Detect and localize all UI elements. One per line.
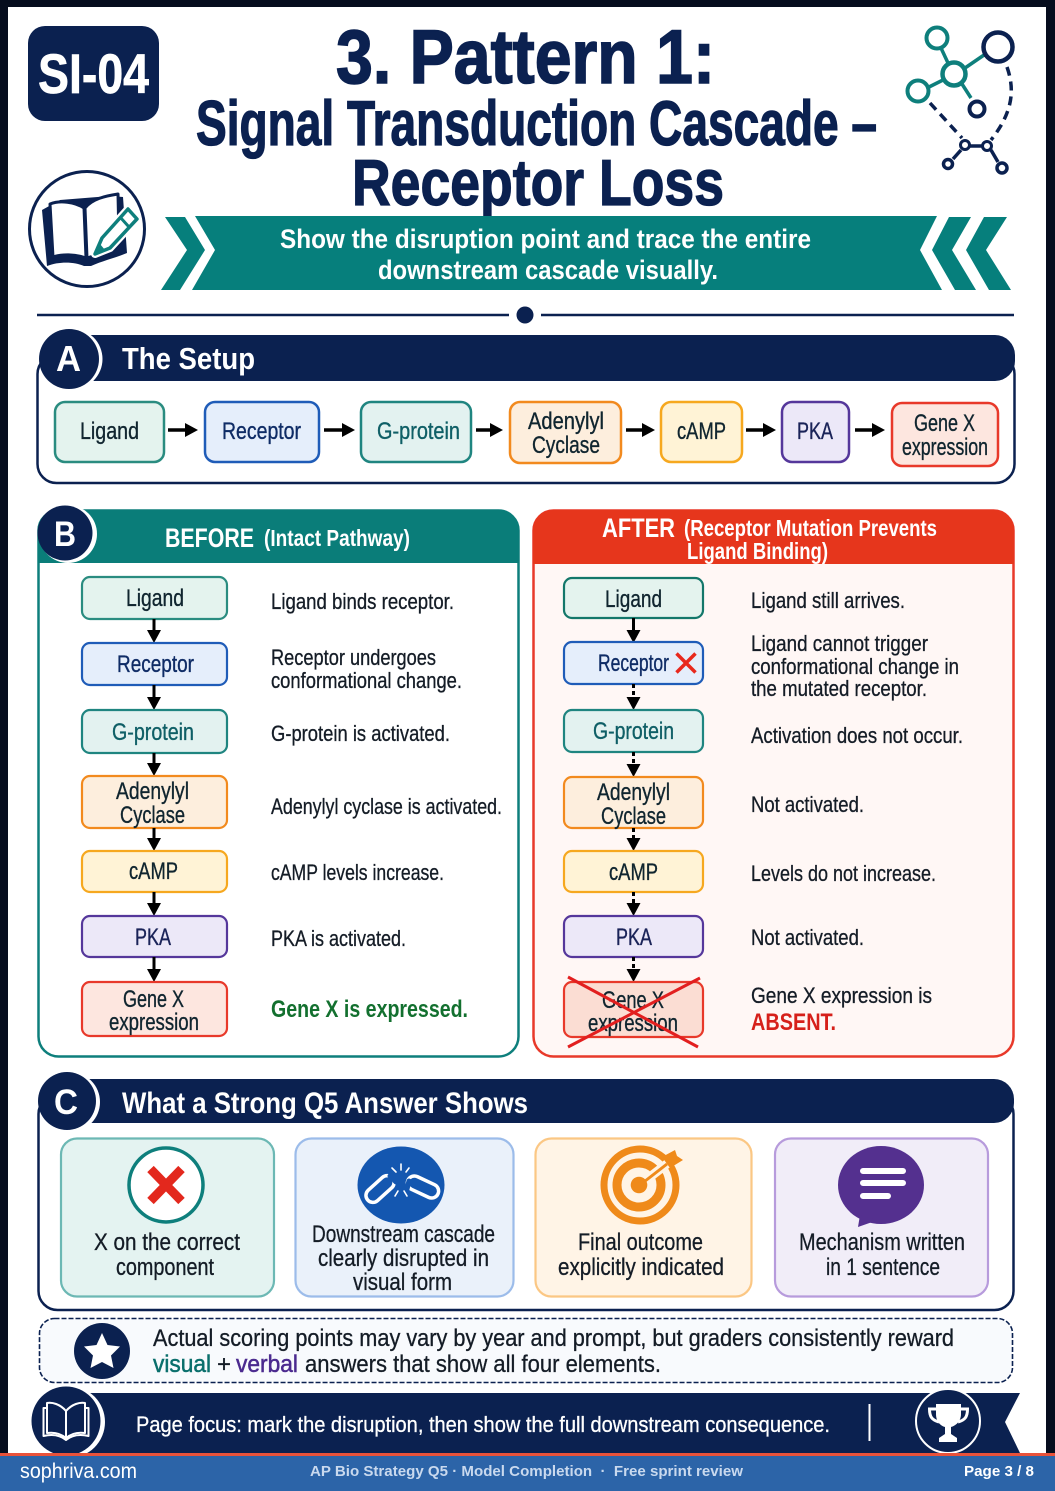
text: conformational change: conformational change. <box>271 668 462 693</box>
text: activation does not occur: Activation does not occur. <box>751 723 963 748</box>
step: Gene X expression crossed out: expression <box>588 1010 678 1037</box>
card: downstream disrupted <box>296 1138 514 1296</box>
arrow <box>147 828 161 851</box>
footer bar <box>0 1453 1055 1491</box>
panel C: what a strong answer shows: What a Strong Q5 Answer Shows <box>122 1087 528 1120</box>
step: Receptor: Receptor <box>222 418 301 445</box>
icon: book and pencil <box>30 172 144 286</box>
footer banner: page focus: Page focus: mark the disruption, then show the full downstream consequence. <box>136 1412 830 1437</box>
step: Gene X expression: Gene X <box>914 410 975 437</box>
step: Ligand <box>82 577 227 619</box>
step: Adenylyl Cyclase <box>564 777 703 830</box>
text: levels do not increase: Levels do not increase. <box>751 861 936 886</box>
arrow <box>746 423 776 437</box>
text: gene x expressed: Gene X is expressed. <box>271 996 468 1023</box>
arrow <box>855 423 885 437</box>
text: g-protein activated: G-protein is activated. <box>271 721 450 746</box>
step: cAMP <box>661 402 742 462</box>
step: cAMP: cAMP <box>609 859 658 886</box>
text: gene x absent: Gene X expression is <box>751 983 932 1008</box>
arrow: dashed <box>626 684 640 710</box>
step: cAMP <box>564 851 703 892</box>
text: gene x absent: ABSENT. <box>751 1009 836 1036</box>
text: cannot trigger: Ligand cannot trigger <box>751 631 928 656</box>
callout: scoring note: visual <box>153 1351 211 1378</box>
panel A: the setup: The Setup <box>122 341 255 376</box>
badge: SI-04: SI-04 <box>38 42 149 105</box>
step: G-protein: G-protein <box>112 719 194 746</box>
step: Adenylyl Cyclase: Cyclase <box>601 803 666 830</box>
title: 3. Pattern 1: <box>336 15 715 100</box>
card: mechanism: Mechanism written <box>799 1229 965 1256</box>
arrow: dashed <box>626 828 640 851</box>
step: Receptor with X <box>564 642 703 684</box>
step: Receptor <box>205 402 319 462</box>
title: Receptor Loss <box>352 146 724 219</box>
step: G-protein: G-protein <box>593 718 674 745</box>
text: cannot trigger: conformational change in <box>751 654 959 679</box>
panel C: what a strong answer shows: C <box>54 1083 78 1122</box>
step: PKA <box>782 402 849 462</box>
panel B: before: (Intact Pathway) <box>264 525 410 551</box>
step: Receptor <box>82 643 227 685</box>
banner: teal ribbon <box>161 216 1011 290</box>
step: cAMP: cAMP <box>677 418 726 445</box>
step: Gene X expression: expression <box>902 434 988 461</box>
card: X on component <box>61 1138 274 1296</box>
step: Ligand: Ligand <box>605 586 662 613</box>
step: Adenylyl Cyclase: Adenylyl <box>116 778 189 805</box>
text: cannot trigger <box>751 631 959 701</box>
step: Gene X expression crossed out: Gene X <box>602 987 664 1014</box>
panel B: before: BEFORE <box>165 523 254 553</box>
icon: speech bubble <box>838 1146 924 1227</box>
step: cAMP: cAMP <box>129 858 178 885</box>
step: Adenylyl Cyclase: Adenylyl <box>528 408 604 435</box>
arrow <box>324 423 355 437</box>
arrow <box>476 423 503 437</box>
arrow: dashed <box>626 892 640 916</box>
panel C: what a strong answer shows <box>38 1072 1014 1310</box>
icon: molecule network <box>908 28 1012 173</box>
step: Gene X expression: expression <box>109 1009 199 1036</box>
step: Ligand <box>55 402 164 462</box>
icon: star <box>74 1323 130 1379</box>
callout: scoring note: answers that show all four elements. <box>305 1351 661 1378</box>
callout: scoring note: Actual scoring points may vary by year and prompt, but graders consistently reward <box>153 1325 954 1352</box>
arrow <box>147 957 161 982</box>
icon: open book <box>44 1403 88 1440</box>
text: ligand arrives: Ligand still arrives. <box>751 588 905 613</box>
card: mechanism <box>775 1138 988 1296</box>
icon: broken chain <box>358 1146 444 1224</box>
panel A: the setup <box>38 328 1015 483</box>
panel B: after: (Receptor Mutation Prevents <box>684 515 937 541</box>
callout: scoring note: + <box>217 1351 231 1378</box>
card: mechanism: in 1 sentence <box>826 1254 940 1281</box>
text: cannot trigger: the mutated receptor. <box>751 676 927 701</box>
step: G-protein <box>361 402 471 462</box>
card: final outcome: explicitly indicated <box>558 1254 724 1281</box>
panel B: before: B <box>54 515 76 554</box>
arrow: dashed <box>626 752 640 777</box>
step: PKA: PKA <box>616 924 652 951</box>
arrow <box>168 423 198 437</box>
text: pka activated: PKA is activated. <box>271 926 406 951</box>
step: Adenylyl Cyclase: Cyclase <box>532 432 600 459</box>
step: Adenylyl Cyclase <box>82 776 227 829</box>
footer bar: Page 3 / 8 <box>964 1463 1034 1480</box>
arrow <box>626 423 655 437</box>
text: ligand binds: Ligand binds receptor. <box>271 589 454 614</box>
arrow <box>626 618 640 643</box>
panel B: after: Ligand Binding) <box>687 538 828 564</box>
icon: trophy <box>916 1389 980 1453</box>
step: Ligand: Ligand <box>126 585 184 612</box>
banner: teal ribbon: downstream cascade visually. <box>378 255 718 285</box>
arrow <box>147 619 161 643</box>
step: Ligand: Ligand <box>80 418 139 445</box>
text: not activated: Not activated. <box>751 792 864 817</box>
step: Gene X expression <box>82 982 227 1036</box>
text: conformational change <box>271 645 462 693</box>
panel B: before <box>38 505 519 1056</box>
step: PKA: PKA <box>797 418 833 445</box>
step: Gene X expression <box>892 403 998 466</box>
step: G-protein <box>564 710 703 752</box>
step: Adenylyl Cyclase <box>510 402 621 463</box>
step: Receptor with X: Receptor <box>598 650 669 677</box>
arrow <box>147 753 161 776</box>
text: gene x absent <box>751 983 932 1036</box>
banner: teal ribbon: Show the disruption point and trace the entire <box>280 224 811 254</box>
card: X on component: X on the correct <box>94 1229 240 1256</box>
panel B: after <box>533 510 1014 1056</box>
step: cAMP <box>82 851 227 892</box>
callout: scoring note: verbal <box>236 1351 298 1378</box>
badge: SI-04 <box>28 26 159 121</box>
step: PKA <box>82 916 227 957</box>
footer banner: page focus <box>32 1386 1020 1458</box>
footer bar: AP Bio Strategy Q5 · Model Completion · Free sprint review <box>310 1463 743 1480</box>
card: final outcome <box>536 1138 752 1296</box>
arrow <box>147 892 161 916</box>
step: Adenylyl Cyclase: Adenylyl <box>597 779 670 806</box>
panel B: after: AFTER <box>602 513 675 543</box>
panel A: the setup: A <box>56 338 81 379</box>
step: G-protein <box>82 710 227 753</box>
step: PKA: PKA <box>135 924 171 951</box>
arrow <box>147 685 161 710</box>
card: downstream disrupted: clearly disrupted in <box>318 1245 489 1272</box>
footer bar: sophriva.com <box>20 1460 137 1483</box>
callout: scoring note <box>40 1318 1012 1382</box>
step: Adenylyl Cyclase: Cyclase <box>120 802 185 829</box>
step: G-protein: G-protein <box>377 418 460 445</box>
card: downstream disrupted: visual form <box>353 1269 452 1296</box>
card: downstream disrupted: Downstream cascade <box>312 1221 495 1248</box>
step: Gene X expression: Gene X <box>123 986 184 1013</box>
text: not activated: Not activated. <box>751 925 864 950</box>
text: adenylyl cyclase activated: Adenylyl cyclase is activated. <box>271 794 502 819</box>
text: camp levels: cAMP levels increase. <box>271 860 444 885</box>
card: final outcome: Final outcome <box>578 1229 703 1256</box>
icon: red X <box>129 1148 203 1222</box>
step: Gene X expression crossed out <box>564 977 703 1047</box>
title <box>196 15 877 219</box>
card: X on component: component <box>116 1254 214 1281</box>
icon: target <box>604 1149 683 1221</box>
step: Ligand <box>564 578 703 618</box>
step: Receptor: Receptor <box>117 651 194 678</box>
text: conformational change: Receptor undergoes <box>271 645 436 670</box>
step: PKA <box>564 916 703 957</box>
arrow: dashed <box>626 957 640 982</box>
